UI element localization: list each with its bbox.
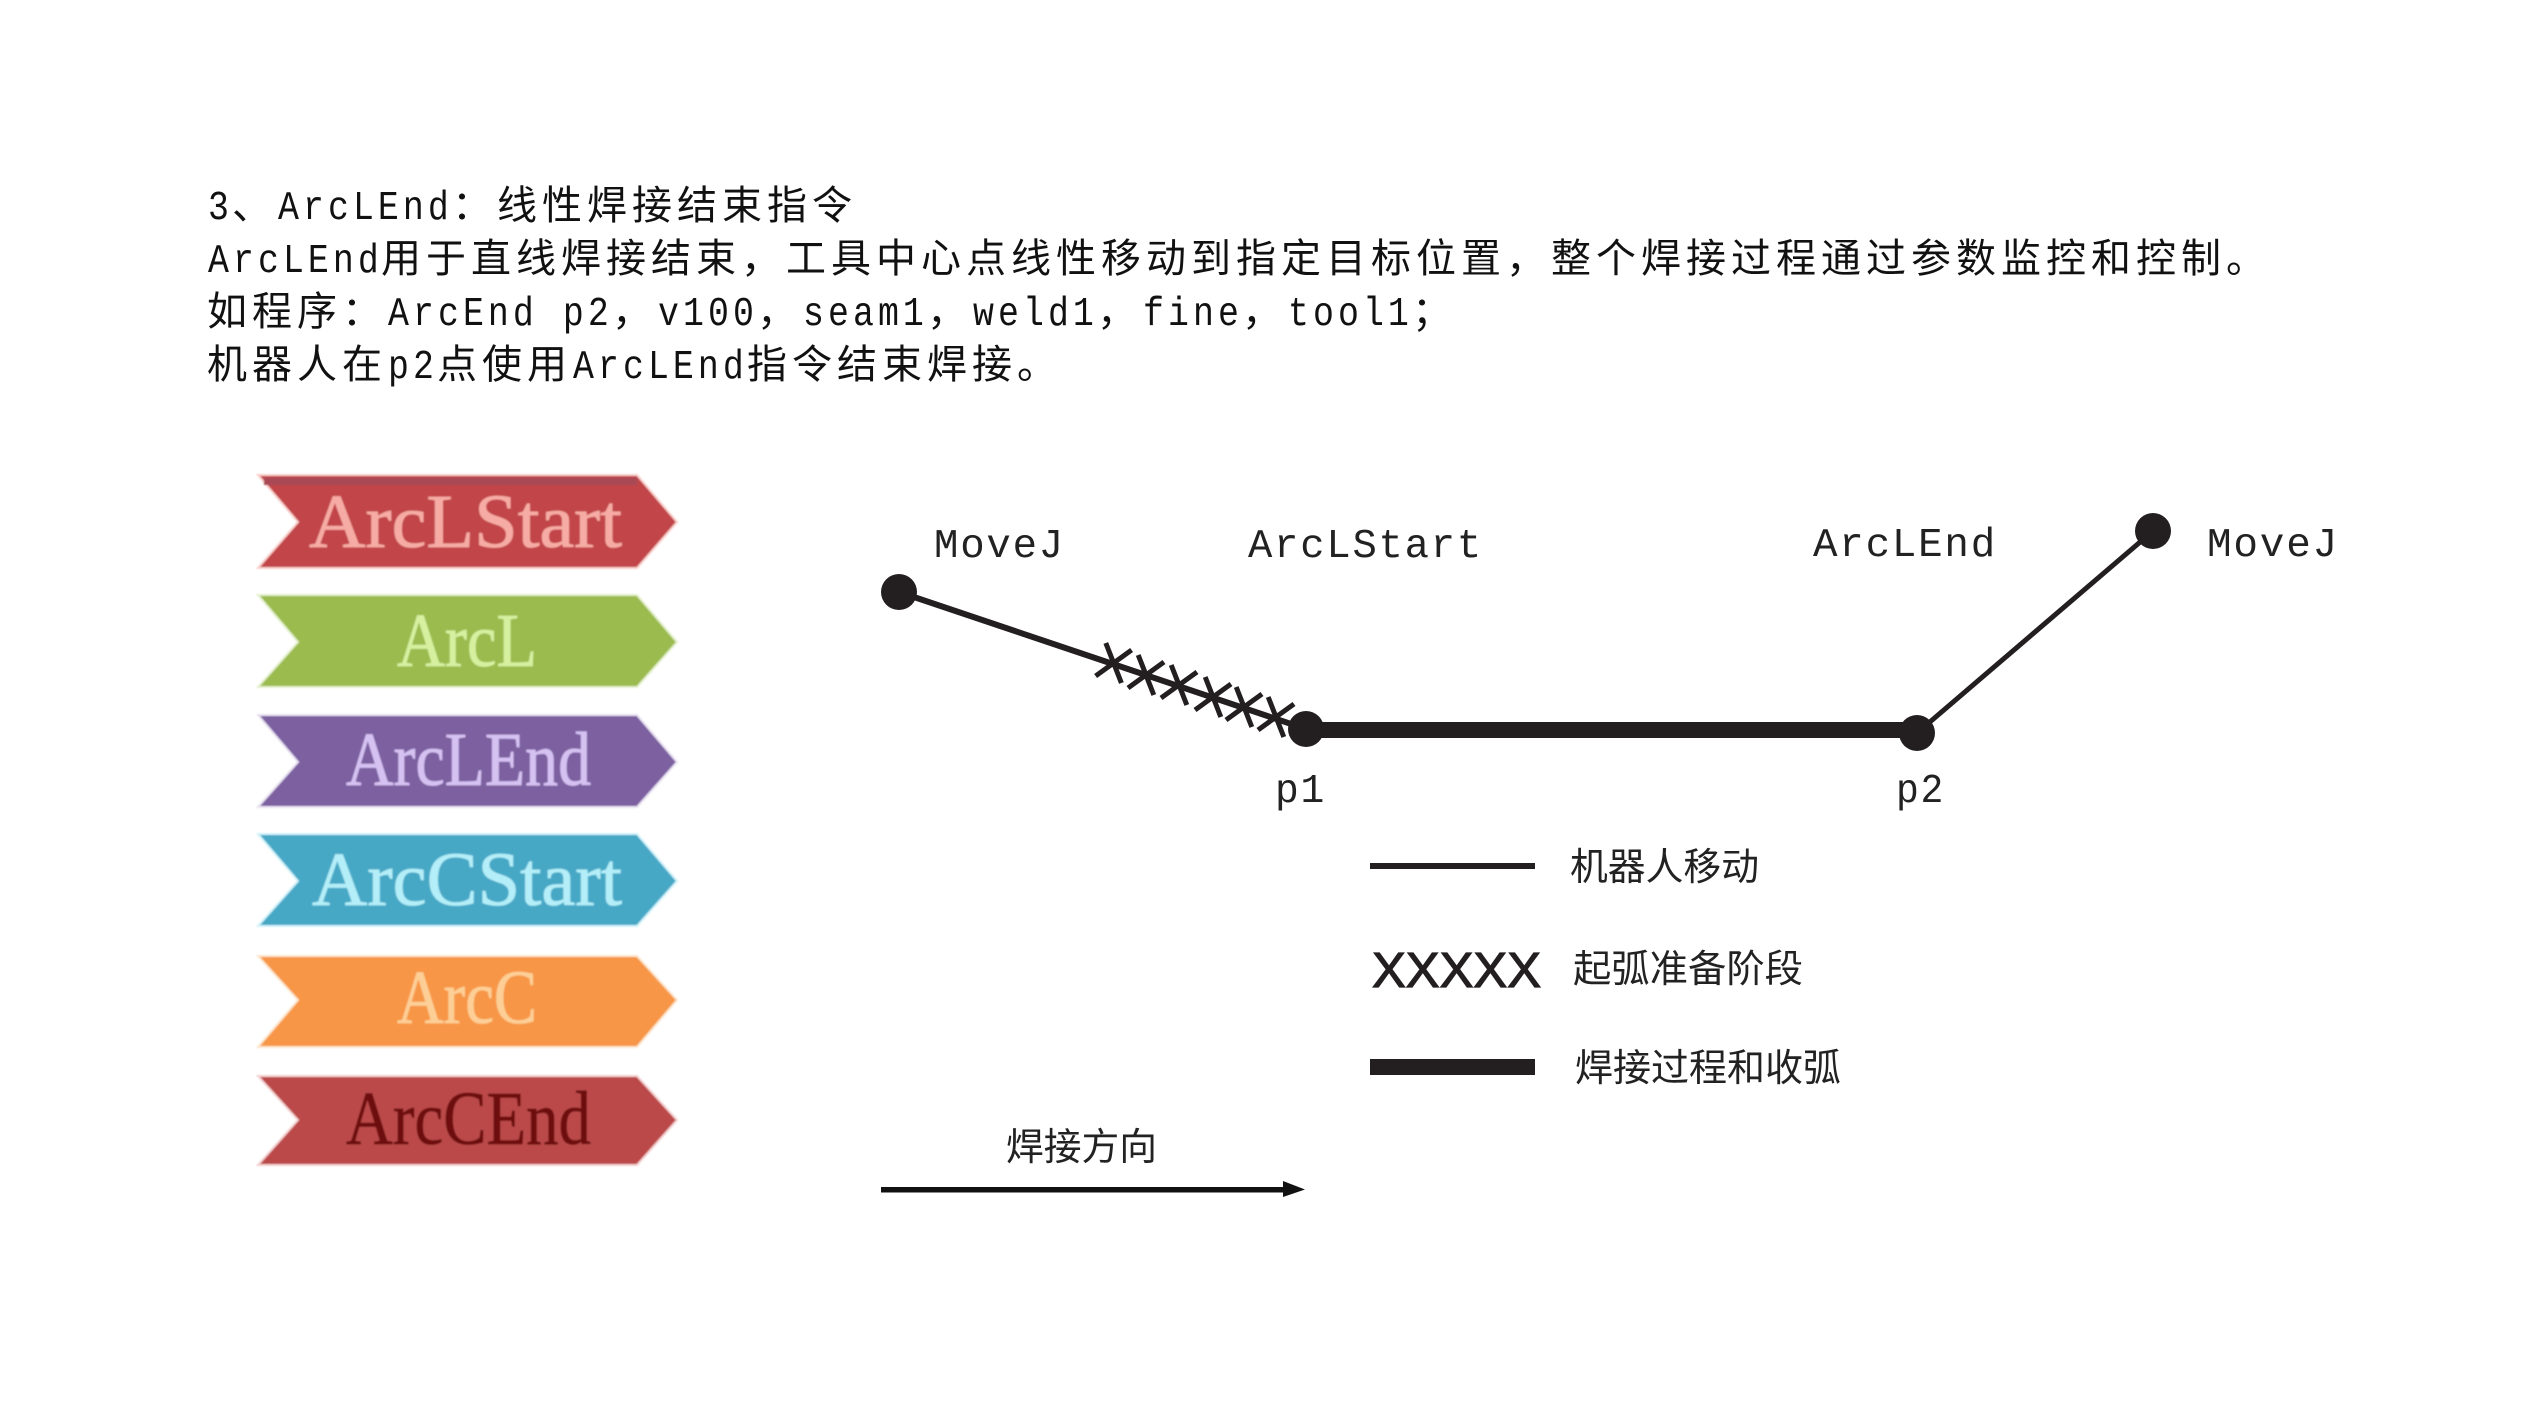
ribbon: ArcL (258, 595, 677, 687)
path: robot move lines (899, 531, 2153, 733)
ribbon: ArcCStart (258, 834, 677, 926)
ribbon: ArcLStart: ArcLStart (309, 480, 622, 564)
points: path dots (881, 513, 2171, 751)
explanation line: 机器人在 (207, 343, 387, 387)
program line: ， (1242, 290, 1287, 334)
ribbon: ArcLEnd: ArcLEnd (346, 718, 591, 802)
explanation line: 点使用 (437, 343, 572, 387)
program line: ， (1097, 290, 1142, 334)
label: p1: p1 (1275, 769, 1326, 815)
heading: ：线性焊接结束指令 (452, 184, 857, 228)
program line: seam1 (803, 292, 928, 338)
ribbon: ArcLStart (258, 475, 677, 568)
ribbon: ArcCStart: ArcCStart (312, 838, 622, 922)
marks: arc start preparation crosses (1096, 643, 1294, 737)
heading: ArcLEnd (278, 186, 453, 232)
program line: tool1 (1288, 292, 1413, 338)
ribbon: ArcC (258, 956, 677, 1047)
heading: 、 (232, 184, 277, 228)
explanation line: 指令结束焊接。 (747, 343, 1062, 387)
explanation line: p2 (388, 345, 438, 391)
program line: weld1 (973, 292, 1098, 338)
heading: 3 (208, 186, 233, 232)
label: p2: p2 (1896, 769, 1945, 815)
path: weld seam (1306, 722, 1917, 738)
arrow: welding direction: 焊接方向 (1006, 1127, 1157, 1169)
legend (1370, 847, 1841, 1090)
chart: welding path diagram (881, 513, 2339, 815)
label: ArcLStart: ArcLStart (1248, 524, 1483, 570)
heading (208, 184, 857, 232)
program line: ， (757, 290, 802, 334)
description line: ArcLEnd (208, 239, 383, 285)
program line: ； (1412, 290, 1457, 334)
description line: 用于直线焊接结束，工具中心点线性移动到指定目标位置，整个焊接过程通过参数监控和控制。 (381, 237, 2271, 281)
ribbon: ArcC: ArcC (397, 956, 537, 1040)
explanation line: ArcLEnd (573, 345, 748, 391)
arrow: welding direction (881, 1127, 1305, 1197)
legend item: robot move: 机器人移动 (1570, 847, 1759, 889)
label: ArcLEnd: ArcLEnd (1813, 523, 1997, 569)
program line: fine (1143, 292, 1243, 338)
legend item: arc start preparation (1372, 944, 1803, 998)
program line: ArcEnd p2 (388, 292, 613, 338)
ribbon: ArcLEnd (258, 715, 677, 807)
program line: 如程序： (207, 290, 387, 334)
text block: instruction description (207, 184, 2271, 391)
label: MoveJ end: MoveJ (2207, 523, 2339, 569)
ribbon: ArcL: ArcL (397, 599, 537, 683)
legend item: arc start preparation: 起弧准备阶段 (1573, 949, 1803, 991)
program line: v100 (658, 292, 758, 338)
label: MoveJ start: MoveJ (934, 524, 1065, 570)
legend item: welding and arc end (1370, 1048, 1841, 1090)
ribbon: ArcCEnd (258, 1076, 677, 1165)
legend item: robot move (1370, 847, 1759, 889)
program line: ， (612, 290, 657, 334)
panel: instruction ribbon list (258, 475, 677, 1165)
legend item: arc start preparation: XXXXX (1372, 944, 1541, 998)
program line: ， (927, 290, 972, 334)
legend item: welding and arc end: 焊接过程和收弧 (1575, 1048, 1841, 1090)
program line (207, 290, 1457, 338)
ribbon: ArcCEnd: ArcCEnd (346, 1077, 591, 1161)
explanation line (207, 343, 1062, 391)
